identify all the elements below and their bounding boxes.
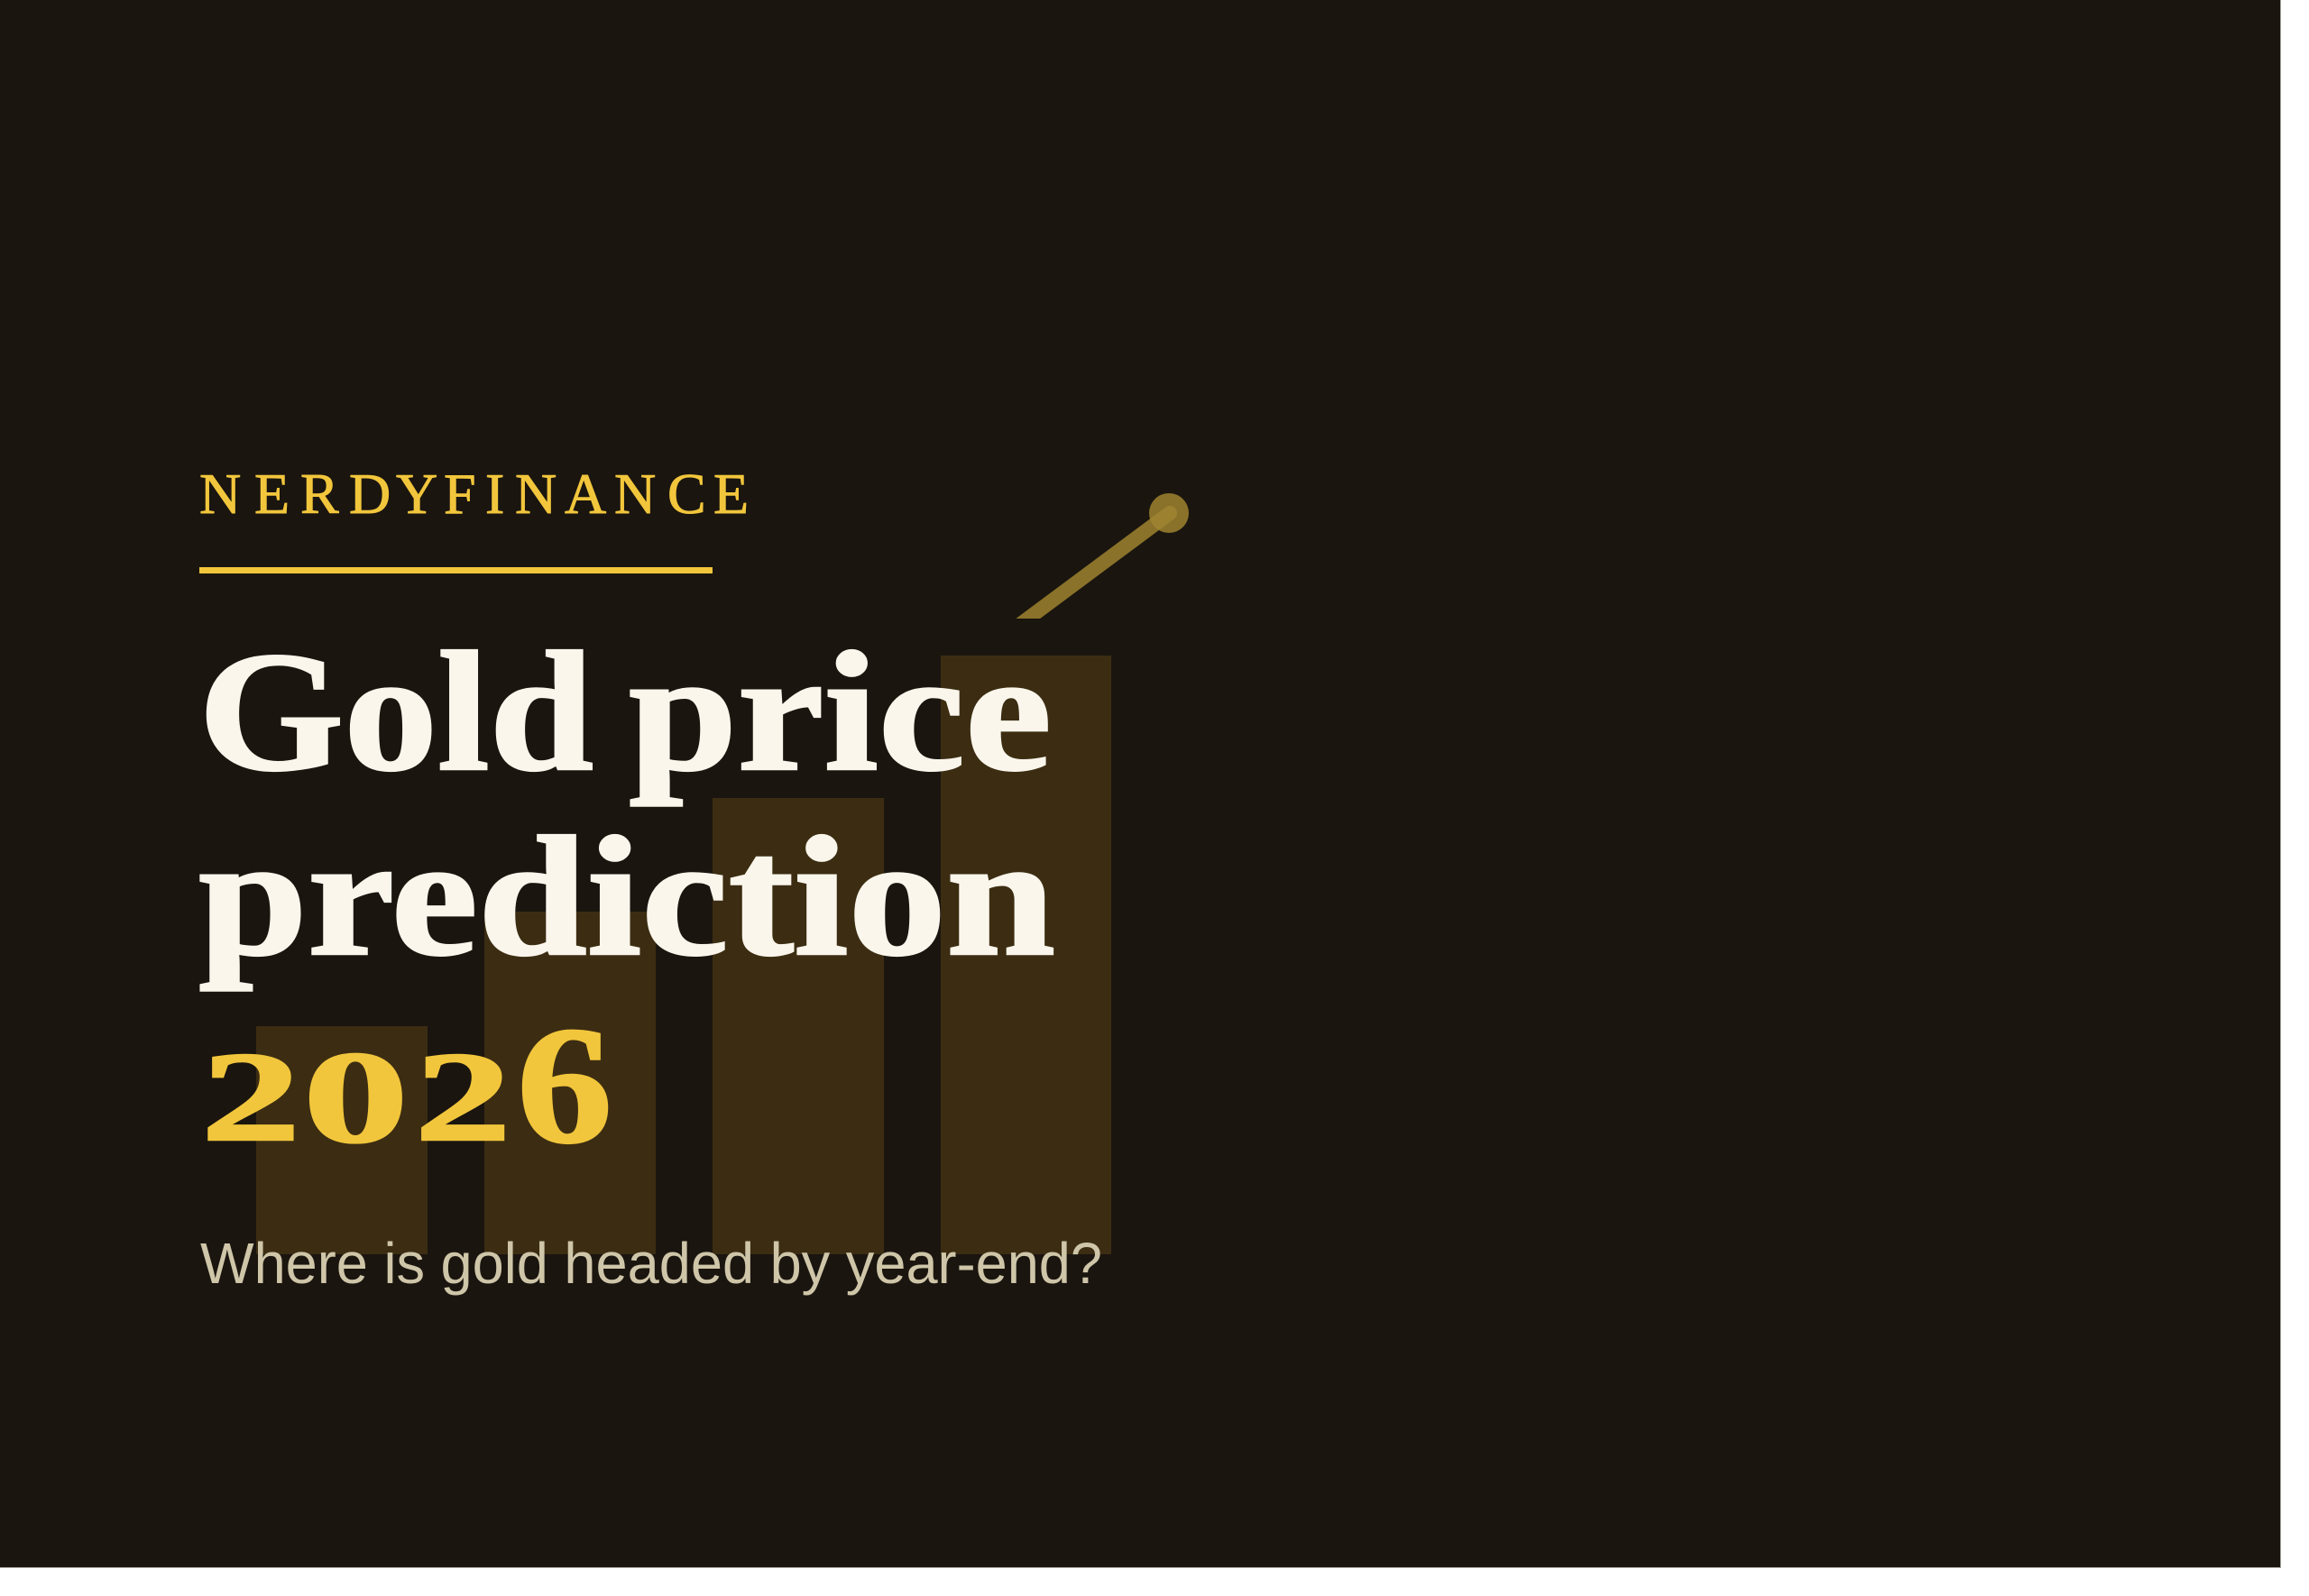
year 2026: 2 (201, 1026, 300, 1168)
title: Gold (198, 618, 593, 807)
year 2026: 0 (303, 1024, 409, 1170)
title (198, 618, 1055, 992)
year 2026: 2 (415, 1026, 511, 1168)
subtitle: Where is gold headed by year-end? (200, 1231, 1102, 1296)
brand name: NERDYFINANCE (199, 462, 749, 526)
year 2026: 6 (517, 993, 612, 1179)
year 2026 (201, 993, 612, 1179)
title: prediction (198, 803, 1055, 992)
bar chart: rising background bars (256, 656, 1111, 1254)
title: price (629, 618, 1052, 807)
divider rule (199, 567, 713, 573)
arrow: upward trend line with dot (1016, 493, 1189, 619)
